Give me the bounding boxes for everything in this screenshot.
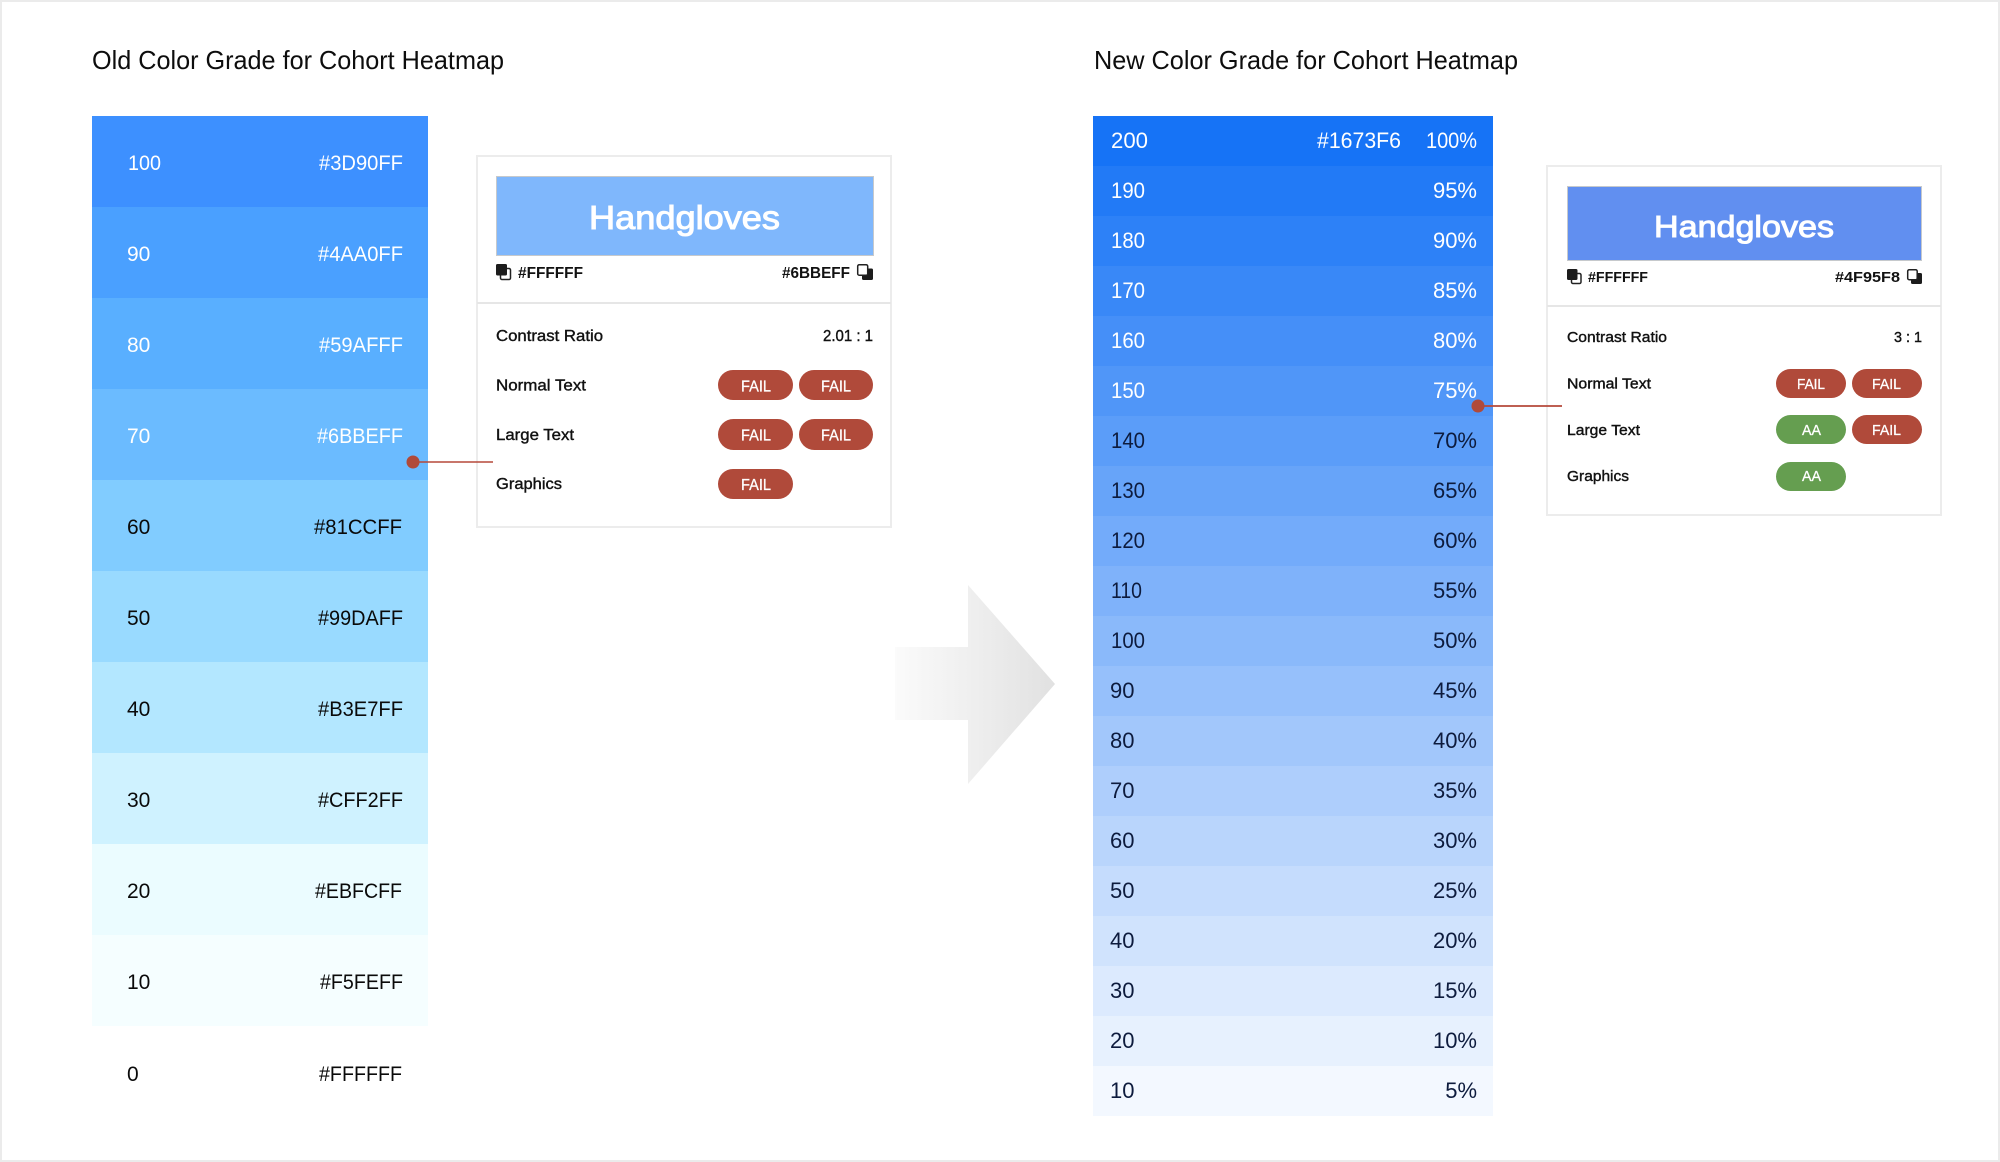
normal text row bbox=[1567, 369, 1922, 398]
panel: old color scale bbox=[92, 116, 428, 1117]
old row 100: #3D90FF bbox=[319, 152, 403, 175]
new row 50: 25% bbox=[1433, 878, 1477, 903]
new row 170: 85% bbox=[1433, 278, 1477, 303]
new row 30: 15% bbox=[1433, 978, 1477, 1003]
old row 90 bbox=[92, 207, 428, 298]
contrast ratio row bbox=[1567, 329, 1922, 346]
icon: foreground copy bbox=[1567, 269, 1581, 284]
new row 190: 95% bbox=[1433, 178, 1477, 203]
background hex: #6BBEFF bbox=[782, 265, 850, 282]
new row 30: 30 bbox=[1110, 978, 1134, 1003]
old row 80: #59AFFF bbox=[319, 334, 403, 357]
new row 100: 50% bbox=[1433, 628, 1477, 653]
new row 80: 40% bbox=[1433, 728, 1477, 753]
old row 10: #F5FEFF bbox=[320, 971, 403, 994]
new row 90: 45% bbox=[1433, 678, 1477, 703]
swatch with sample text: Handgloves bbox=[1654, 209, 1834, 244]
old row 60: #81CCFF bbox=[314, 516, 402, 539]
contrast ratio row: Contrast Ratio bbox=[496, 328, 603, 345]
contrast ratio row: 3 : 1 bbox=[1894, 329, 1922, 346]
graphics row bbox=[1567, 462, 1846, 491]
foreground hex: #FFFFFF bbox=[1588, 269, 1648, 286]
old row 80: 80 bbox=[127, 334, 150, 357]
icon: background copy bbox=[858, 265, 873, 280]
contrast ratio row: 2.01 : 1 bbox=[823, 328, 873, 345]
old row 30 bbox=[92, 753, 428, 844]
old row 60: 60 bbox=[127, 516, 150, 539]
old row 20: 20 bbox=[127, 880, 150, 903]
new row 10: 10 bbox=[1110, 1078, 1134, 1103]
new row 120 bbox=[1093, 516, 1493, 566]
new row 110 bbox=[1093, 566, 1493, 616]
old row 40: #B3E7FF bbox=[318, 698, 403, 721]
graphics row: FAIL bbox=[741, 477, 771, 494]
new row 60 bbox=[1093, 816, 1493, 866]
old row 40 bbox=[92, 662, 428, 753]
title: old color grade: Old Color Grade for Cohort Heatmap bbox=[92, 45, 504, 75]
new row 120: 60% bbox=[1433, 528, 1477, 553]
large text row bbox=[1567, 415, 1922, 444]
new row 180 bbox=[1093, 216, 1493, 266]
new row 50: 50 bbox=[1110, 878, 1134, 903]
foreground hex: #FFFFFF bbox=[518, 265, 583, 282]
old row 0: #FFFFFF bbox=[319, 1063, 402, 1086]
panel: new contrast card bbox=[1547, 166, 1941, 515]
normal text row: Normal Text bbox=[1567, 376, 1652, 392]
new row 150: 150 bbox=[1111, 378, 1145, 403]
old row 30: #CFF2FF bbox=[318, 789, 403, 812]
new row 80 bbox=[1093, 716, 1493, 766]
contrast ratio row bbox=[496, 328, 873, 345]
large text row: FAIL bbox=[741, 428, 771, 444]
old row 100 bbox=[92, 116, 428, 207]
new row 100 bbox=[1093, 616, 1493, 666]
arrow: old to new bbox=[895, 585, 1055, 784]
graphics row: AA bbox=[1802, 468, 1821, 485]
new row 170 bbox=[1093, 266, 1493, 316]
new row 70: 70 bbox=[1110, 778, 1134, 803]
old row 70: 70 bbox=[127, 425, 150, 448]
large text row: Large Text bbox=[496, 427, 575, 444]
new row 10 bbox=[1093, 1066, 1493, 1116]
new row 20 bbox=[1093, 1016, 1493, 1066]
connector: new row 150 to card bbox=[1472, 400, 1562, 412]
new row 120: 120 bbox=[1111, 528, 1145, 553]
old row 60 bbox=[92, 480, 428, 571]
new row 200: 100% bbox=[1426, 128, 1477, 153]
new row 40 bbox=[1093, 916, 1493, 966]
old row 50 bbox=[92, 571, 428, 662]
new row 190: 190 bbox=[1111, 178, 1145, 203]
new row 70 bbox=[1093, 766, 1493, 816]
graphics row bbox=[496, 469, 793, 499]
icon: foreground copy bbox=[496, 264, 510, 280]
swatch with sample text: Handgloves bbox=[589, 199, 780, 236]
new row 40: 40 bbox=[1110, 928, 1134, 953]
title: new color grade: New Color Grade for Cohort Heatmap bbox=[1094, 45, 1518, 75]
old row 70: #6BBEFF bbox=[317, 425, 403, 448]
connector: old row 70 to card bbox=[406, 456, 493, 468]
normal text row: Normal Text bbox=[496, 378, 587, 394]
new row 200: #1673F6 bbox=[1317, 128, 1401, 153]
new row 10: 5% bbox=[1445, 1078, 1477, 1103]
graphics row: Graphics bbox=[496, 476, 562, 493]
swatch with sample text bbox=[496, 176, 874, 256]
panel: new color scale bbox=[1093, 116, 1493, 1116]
old row 10: 10 bbox=[127, 971, 150, 994]
new row 160 bbox=[1093, 316, 1493, 366]
new row 140 bbox=[1093, 416, 1493, 466]
new row 110: 55% bbox=[1433, 578, 1477, 603]
new row 20: 20 bbox=[1110, 1028, 1134, 1053]
old row 40: 40 bbox=[127, 698, 150, 721]
graphics row: Graphics bbox=[1567, 468, 1629, 485]
new row 80: 80 bbox=[1110, 728, 1134, 753]
old row 30: 30 bbox=[127, 789, 150, 812]
icon: background copy bbox=[1908, 270, 1922, 284]
new row 130 bbox=[1093, 466, 1493, 516]
new row 170: 170 bbox=[1111, 278, 1145, 303]
new row 110: 110 bbox=[1111, 578, 1142, 603]
old row 90: 90 bbox=[127, 243, 150, 266]
normal text row: FAIL bbox=[821, 378, 851, 396]
normal text row: FAIL bbox=[1872, 376, 1901, 393]
normal text row bbox=[496, 370, 873, 400]
new row 40: 20% bbox=[1433, 928, 1477, 953]
old row 10 bbox=[92, 935, 428, 1026]
new row 90: 90 bbox=[1110, 678, 1134, 703]
old row 50: #99DAFF bbox=[318, 607, 403, 630]
large text row: Large Text bbox=[1567, 422, 1641, 439]
new row 180: 90% bbox=[1433, 228, 1477, 253]
new row 160: 80% bbox=[1433, 328, 1477, 353]
new row 200: 200 bbox=[1111, 128, 1148, 153]
new row 20: 10% bbox=[1433, 1028, 1477, 1053]
large text row: FAIL bbox=[821, 428, 851, 444]
new row 140: 140 bbox=[1111, 428, 1145, 453]
old row 70 bbox=[92, 389, 428, 480]
new row 100: 100 bbox=[1111, 628, 1145, 653]
old row 90: #4AA0FF bbox=[318, 243, 403, 266]
normal text row: FAIL bbox=[1797, 376, 1825, 393]
old row 0: 0 bbox=[127, 1063, 139, 1086]
old row 100: 100 bbox=[128, 152, 161, 175]
old row 50: 50 bbox=[127, 607, 150, 630]
new row 60: 60 bbox=[1110, 828, 1134, 853]
new row 90 bbox=[1093, 666, 1493, 716]
new row 190 bbox=[1093, 166, 1493, 216]
panel: old contrast card bbox=[477, 156, 891, 527]
large text row: AA bbox=[1802, 422, 1821, 439]
contrast ratio row: Contrast Ratio bbox=[1567, 329, 1667, 346]
normal text row: FAIL bbox=[741, 378, 771, 396]
large text row bbox=[496, 419, 873, 450]
new row 60: 30% bbox=[1433, 828, 1477, 853]
background hex: #4F95F8 bbox=[1835, 269, 1900, 286]
old row 20 bbox=[92, 844, 428, 935]
new row 180: 180 bbox=[1111, 228, 1145, 253]
old row 80 bbox=[92, 298, 428, 389]
new row 70: 35% bbox=[1433, 778, 1477, 803]
old row 20: #EBFCFF bbox=[315, 880, 402, 903]
new row 30 bbox=[1093, 966, 1493, 1016]
swatch with sample text bbox=[1568, 186, 1922, 260]
new row 130: 130 bbox=[1111, 478, 1145, 503]
new row 150 bbox=[1093, 366, 1493, 416]
new row 150: 75% bbox=[1433, 378, 1477, 403]
new row 160: 160 bbox=[1111, 328, 1145, 353]
new row 50 bbox=[1093, 866, 1493, 916]
new row 130: 65% bbox=[1433, 478, 1477, 503]
large text row: FAIL bbox=[1872, 422, 1901, 439]
new row 200 bbox=[1093, 116, 1493, 166]
old row 0 bbox=[92, 1026, 428, 1117]
new row 140: 70% bbox=[1433, 428, 1477, 453]
